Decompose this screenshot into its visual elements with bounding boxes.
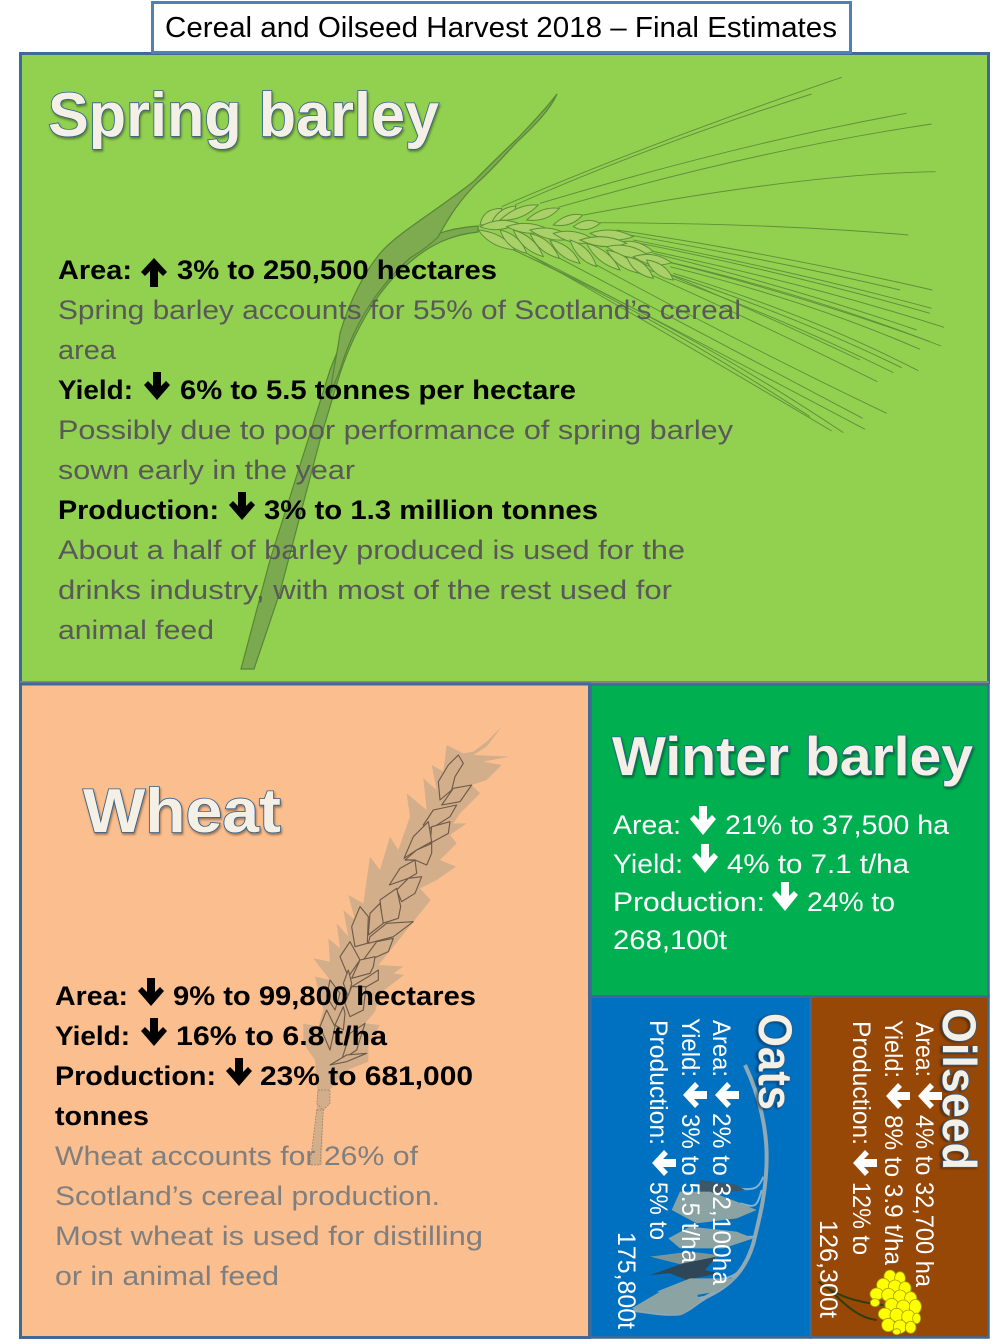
production label: Production: [55,1061,216,1091]
spring barley border divider [20,681,989,684]
oats statistics text [612,1018,739,1329]
yield label: Yield: [879,1020,907,1078]
winter barley background [590,684,988,996]
winter barley statistics text [613,806,950,955]
icon: left arrow [853,1150,877,1176]
production note line 2: drinks industry, with most of the rest used for [58,575,672,605]
yield value: 16% to 6.8 t/ha [176,1021,388,1051]
title box [152,2,850,52]
production label: Production: [58,495,219,525]
yield label: Yield: [613,849,683,879]
area value: 2% to 32,100ha [707,1113,735,1285]
title text: Cereal and Oilseed Harvest 2018 – Final Estimates [165,12,837,44]
production value: 24% to [807,887,895,917]
area label: Area: [55,981,128,1011]
heading: Spring barley: Spring barley [48,81,440,150]
yield label: Yield: [58,375,133,405]
barley stem [241,226,478,669]
spring barley background [20,54,988,682]
heading: Oilseed: Oilseed [933,1008,986,1170]
oat stalk [633,1065,767,1314]
yield value: 6% to 5.5 tonnes per hectare [180,375,576,405]
wheat note line 3: Most wheat is used for distilling [55,1221,483,1251]
panel: oilseed [810,996,988,1338]
yield label: Yield: [676,1018,704,1077]
production label: Production: [644,1020,672,1145]
icon: left arrow [886,1083,910,1109]
oilseed background [810,996,988,1338]
panel: wheat [20,684,590,1338]
area value: 9% to 99,800 hectares [173,981,476,1011]
yield note continued: sown early in the year [58,455,355,485]
oats background [590,996,810,1338]
oilseed statistics text [814,1020,942,1318]
barley head [478,205,673,280]
wheat background [20,684,590,1338]
icon: down arrow [692,844,718,873]
icon: left arrow [652,1150,676,1176]
wheat stalk [310,1090,330,1165]
icon: left arrow [918,1083,942,1109]
illustration: oat plant [632,1065,767,1315]
icon: down arrow [226,1058,252,1086]
production label: Production: [613,887,765,917]
yield value: 3% to 5.5 t/ha [676,1114,704,1263]
icon: up arrow [141,258,167,287]
wheat note line 2: Scotland’s cereal production. [55,1181,440,1211]
production value continued: 268,100t [613,925,728,955]
wheat grains [320,755,472,1065]
barley awns [502,77,944,433]
area label: Area: [707,1020,735,1077]
barley leaf [330,94,557,395]
production label: Production: [847,1021,875,1145]
wheat statistics text [55,978,483,1291]
heading: Wheat: Wheat [83,777,281,846]
area value: 4% to 32,700 ha [910,1115,938,1287]
icon: down arrow [772,882,798,911]
area note: Spring barley accounts for 55% of Scotland’s cereal [58,295,741,325]
flower blossoms [870,1270,921,1335]
spring barley statistics text [58,255,741,645]
illustration: barley plant [241,77,944,669]
icon: down arrow [138,978,164,1006]
wheat note line 4: or in animal feed [55,1261,279,1291]
icon: left arrow [715,1082,739,1108]
production note line 3: animal feed [58,615,214,645]
yield value: 4% to 7.1 t/ha [727,849,910,879]
area label: Area: [910,1022,938,1077]
heading: Oats: Oats [749,1013,802,1110]
icon: down arrow [690,806,716,835]
production value continued: tonnes [55,1101,149,1131]
production value: 5% to [644,1182,672,1240]
production value continued: 126,300t [814,1220,842,1318]
oat spikelets [632,1180,757,1315]
flower stems [818,1282,883,1320]
oat branches [697,1177,763,1298]
icon: down arrow [229,492,255,520]
panel: winter barley [590,684,988,996]
production value: 23% to 681,000 [260,1061,473,1091]
production value continued: 175,800t [612,1232,640,1329]
icon: down arrow [144,372,170,400]
heading: Winter barley: Winter barley [612,725,973,787]
area label: Area: [58,255,132,285]
area value: 3% to 250,500 hectares [177,255,497,285]
area note continued: area [58,335,117,365]
wheat silhouette [303,727,509,1165]
production value: 3% to 1.3 million tonnes [264,495,598,525]
panel: oats [590,996,810,1338]
icon: left arrow [683,1082,707,1108]
production note line 1: About a half of barley produced is used for the [58,535,685,565]
yield note: Possibly due to poor performance of spring barley [58,415,734,445]
icon: down arrow [141,1018,167,1046]
illustration: oilseed rape flower [818,1270,921,1335]
area value: 21% to 37,500 ha [725,810,950,840]
illustration: wheat ear [303,727,509,1165]
area label: Area: [613,810,681,840]
title [152,2,850,52]
production value: 12% to [847,1182,875,1255]
yield value: 8% to 3.9 t/ha [879,1115,907,1265]
wheat note line 1: Wheat accounts for 26% of [55,1141,419,1171]
panel: spring barley [20,54,989,684]
yield label: Yield: [55,1021,130,1051]
